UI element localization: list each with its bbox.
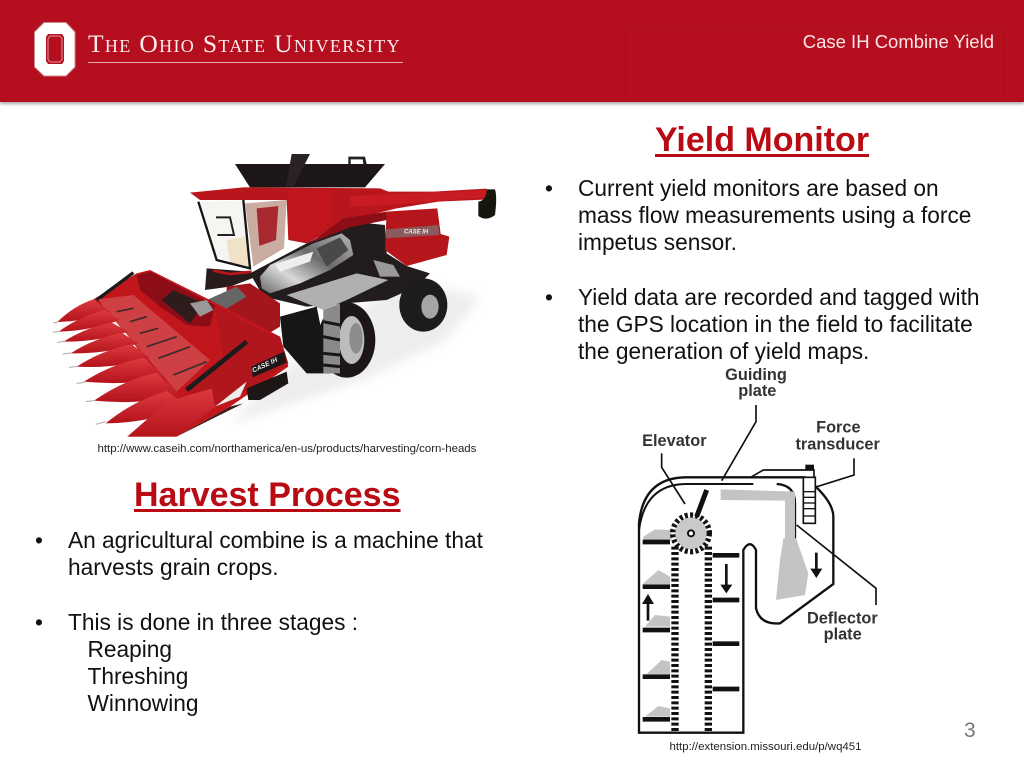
slide topic: Case IH Combine Yield <box>803 31 994 52</box>
elevator housing <box>639 477 833 733</box>
bullet 2: • <box>35 608 43 634</box>
diagram labels: plate <box>824 625 862 643</box>
bullet 1: • <box>35 527 43 553</box>
diagram image source: http://extension.missouri.edu/p/wq451 <box>670 741 862 753</box>
page number: 3 <box>964 719 976 742</box>
text: mass flow: Current yield monitors are based on <box>578 175 939 201</box>
text: combine definition <box>68 527 483 580</box>
bullets: yield monitor <box>545 175 980 364</box>
header badge: CASE IH <box>251 357 279 374</box>
text: three stages <box>68 608 358 716</box>
flow arrows <box>642 553 822 621</box>
text: three stages: Threshing <box>88 663 188 689</box>
paddles <box>643 542 739 719</box>
rear wheel <box>399 278 447 332</box>
ground shadow <box>230 280 480 423</box>
text: GPS tagging: the GPS location in the field to facilitate <box>578 311 973 337</box>
text: combine definition: harvests grain crops. <box>68 554 279 580</box>
bullets: harvest process <box>35 527 483 716</box>
text: three stages: Winnowing <box>88 690 198 716</box>
university wordmark: The Ohio State University <box>88 29 401 58</box>
row deck panels <box>98 295 210 392</box>
right side wing <box>190 305 288 407</box>
heading: yield monitor: Yield Monitor <box>655 121 869 159</box>
text: mass flow <box>578 175 971 255</box>
diagram labels: transducer <box>795 435 880 453</box>
text: GPS tagging: Yield data are recorded and tagged with <box>578 284 980 310</box>
text: mass flow: impetus sensor. <box>578 229 737 255</box>
diagram labels: Deflector <box>807 609 878 627</box>
text: three stages: Reaping <box>88 636 172 662</box>
side mechanical parts <box>373 260 400 277</box>
text: three stages: This is done in three stages : <box>68 608 358 634</box>
silver sieve deck <box>287 273 388 310</box>
unloading spout <box>478 189 496 219</box>
header title box <box>625 26 1004 101</box>
silver rotor <box>260 233 353 293</box>
wordmark rule <box>88 62 403 63</box>
force transducer <box>803 477 815 523</box>
bullet 2: • <box>545 284 553 310</box>
front wheels <box>280 307 330 373</box>
leader lines <box>662 453 685 504</box>
body and unloading tube <box>190 187 489 243</box>
corn head body <box>93 270 288 437</box>
engine dark mass <box>250 222 430 307</box>
rear panel <box>385 208 449 266</box>
grain tank <box>235 164 385 187</box>
icon: block O logo <box>34 22 76 76</box>
diagram labels: Elevator <box>642 432 707 450</box>
feeder house <box>227 283 280 337</box>
elevator chains <box>664 547 686 733</box>
cab base <box>205 268 257 290</box>
unloading auger <box>286 154 310 187</box>
header band <box>0 0 1024 102</box>
text: combine definition: An agricultural combine is a machine that <box>68 527 483 553</box>
text: GPS tagging: the generation of yield maps. <box>578 338 869 364</box>
corn snouts <box>57 299 215 437</box>
grain stream <box>643 489 808 717</box>
panel badge: CASE IH <box>404 230 429 236</box>
heading: harvest process: Harvest Process <box>134 476 401 514</box>
text: GPS tagging <box>578 284 980 364</box>
diagram labels: plate <box>738 382 776 400</box>
text: mass flow: mass flow measurements using a force <box>578 202 971 228</box>
diagram labels <box>642 366 880 643</box>
bullet 1: • <box>545 175 553 201</box>
combine image source: http://www.caseih.com/northamerica/en-us/products/harvesting/corn-heads <box>98 443 476 455</box>
cab <box>200 201 252 268</box>
diagram labels: Force <box>816 419 861 437</box>
sprocket <box>675 517 707 549</box>
diagram labels: Guiding <box>725 366 787 384</box>
snout tips <box>53 322 106 424</box>
